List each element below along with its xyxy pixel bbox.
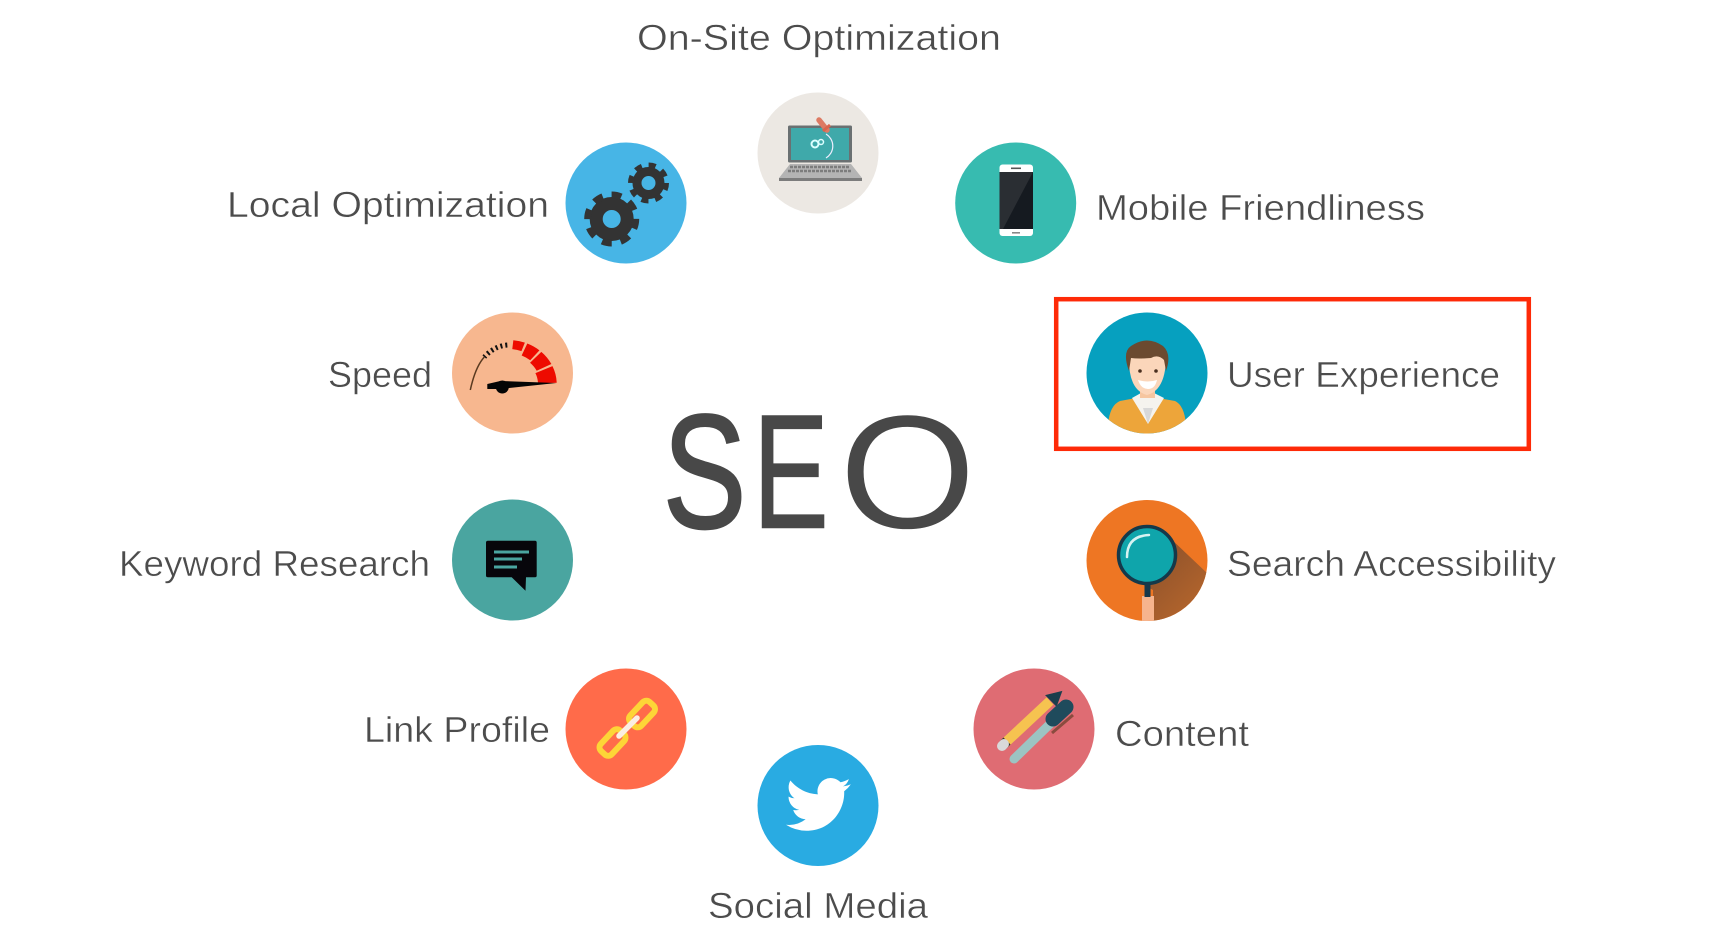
icon: gears <box>566 142 686 264</box>
title: SEO: O <box>839 382 976 562</box>
icon: smiling user <box>1086 312 1208 440</box>
icon: pencil and pen <box>974 668 1094 790</box>
icon: chain link <box>566 668 686 790</box>
label: Speed: Speed <box>328 354 432 395</box>
label: User Experience: User Experience <box>1227 354 1500 395</box>
item: Local Optimization <box>227 142 686 264</box>
label: Search Accessibility: Search Accessibility <box>1227 543 1556 584</box>
icon: laptop with rocket <box>758 92 878 214</box>
label: Mobile Friendliness: Mobile Friendliness <box>1096 187 1425 228</box>
icon: speech bubble <box>452 500 573 620</box>
title: SEO: E <box>753 380 829 562</box>
item: On-Site Optimization <box>637 17 1001 214</box>
item: Search Accessibility <box>1086 500 1556 621</box>
label: Content: Content <box>1115 713 1249 754</box>
item: Mobile Friendliness <box>955 142 1425 264</box>
item: User Experience (highlighted) <box>1056 299 1529 449</box>
label: Link Profile: Link Profile <box>364 709 550 750</box>
item: Social Media <box>708 745 929 926</box>
label: Keyword Research: Keyword Research <box>119 543 430 584</box>
item: Link Profile <box>364 668 686 790</box>
icon: twitter bird <box>758 745 878 866</box>
title: SEO: S <box>663 381 746 562</box>
item: Speed <box>328 312 573 434</box>
icon: smartphone <box>955 142 1076 264</box>
label: Social Media: Social Media <box>708 885 929 926</box>
item: Keyword Research <box>119 500 573 620</box>
icon: speedometer <box>452 312 573 434</box>
label: On-Site Optimization: On-Site Optimization <box>637 17 1001 58</box>
label: Local Optimization: Local Optimization <box>227 184 549 225</box>
item: Content <box>974 668 1249 790</box>
highlight box <box>1056 299 1529 449</box>
icon: magnifying glass <box>1086 500 1208 621</box>
title: SEO <box>663 380 976 562</box>
